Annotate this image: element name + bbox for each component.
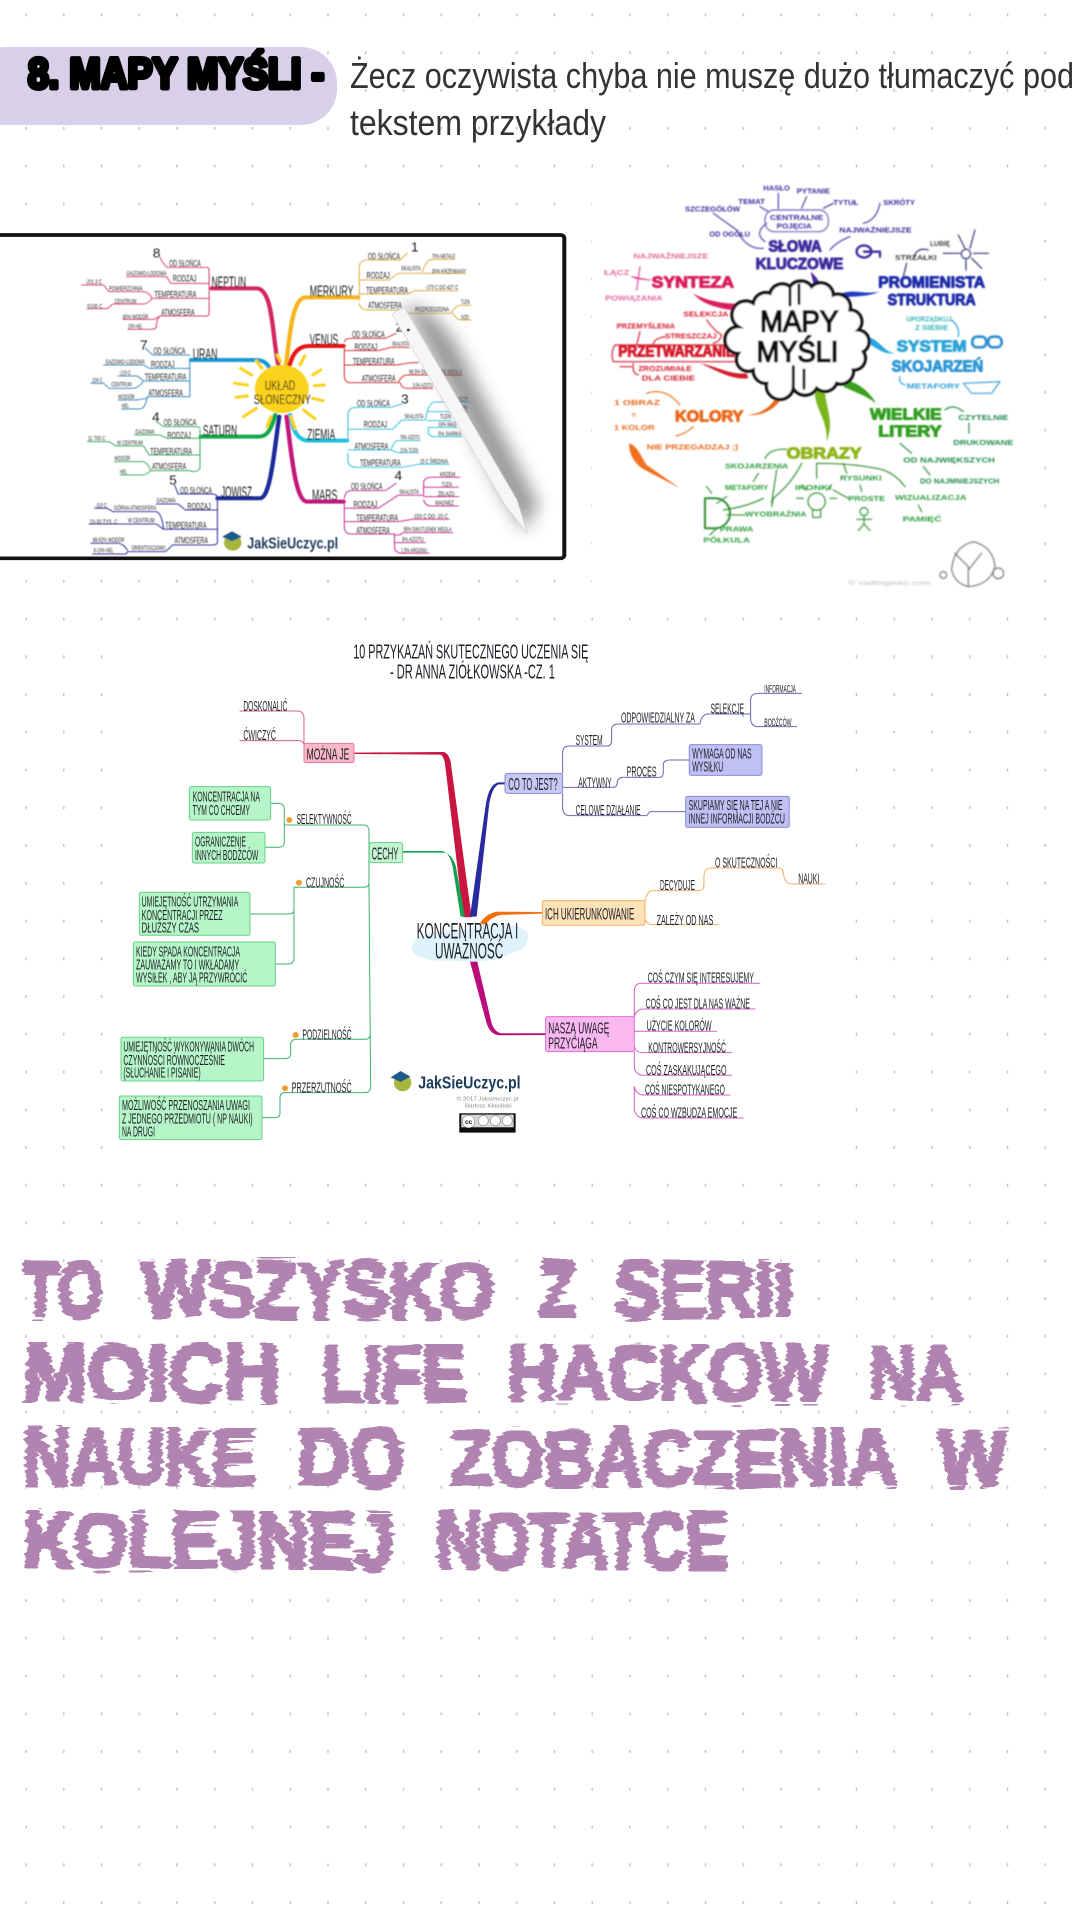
branch: Uran: GAZOWO-LODOWA [105, 359, 145, 366]
branch: Jowisz: JOWISZ [221, 484, 252, 501]
heading pill: 8. Mapy myśli: 8. MAPY MYŚLI - [28, 49, 324, 98]
branch: Neptun: GAZOWO-LODOWA [127, 271, 167, 278]
branch: Saturn: OD SŁOŃCA [164, 417, 197, 428]
branch: Mars: -153 C DO -20 C [413, 514, 448, 520]
branch: Słowa kluczowe: OD OGÓŁU [709, 230, 750, 239]
branch: Obrazy: PAMIĘĆ [903, 515, 943, 524]
branch: Merkury: 1 [411, 240, 419, 255]
branch: Wielkie litery: WIELKIE [870, 406, 942, 423]
branch: Przetwarzanie: STRESZCZAJ [665, 331, 717, 340]
branch: Neptun: -201,3 C [85, 279, 102, 286]
central topic: cloud Koncentracja i uważność: UWAŻNOŚĆ [435, 938, 503, 963]
closing message in purple distressed lettering: NA [870, 1329, 962, 1418]
branch: Uran: RODZAJ [151, 359, 175, 369]
central topic: cloud Mapy Myśli: MYŚLI [757, 335, 838, 369]
branch: Jowisz: GAZOWA [156, 498, 176, 505]
closing message in purple distressed lettering: LIFE [322, 1329, 466, 1418]
branch: Merkury: SÓD [461, 313, 469, 321]
branch: Ich ukierunkowanie: DECYDUJE [660, 878, 695, 894]
branch: Venus: SKALISTA [392, 341, 409, 348]
branch: Saturn: 11 700 C [88, 436, 105, 443]
logo: JakSieUczyc with licence badge: © 2017 Jaksieuczyc.pl [457, 1096, 518, 1103]
branch: System skojarzeń: SYSTEM [897, 339, 967, 356]
branch: Wielkie litery [843, 380, 1013, 485]
closing message in purple distressed lettering: DO [298, 1413, 404, 1502]
branch: Neptun: 5100 C [87, 304, 103, 310]
branch: Merkury: RODZAJ [367, 270, 390, 280]
branch: Merkury: OD SŁOŃCA [368, 251, 400, 261]
credit and tree logo [848, 542, 1004, 587]
branch: Obrazy: PROSTE [848, 494, 885, 503]
branch: Słowa kluczowe: SKRÓTY [883, 198, 915, 207]
trait: czujność: DŁUŻSZY CZAS [142, 919, 199, 937]
branch: Ziemia: TLEN [455, 405, 467, 411]
intro text block [350, 55, 1074, 143]
branch: Jowisz: RODZAJ [187, 501, 211, 511]
branch: Merkury: 30% KRZEMIANY [432, 269, 466, 275]
branch: Uran: URAN [193, 346, 217, 363]
branch: Obrazy: PRAWA [720, 525, 754, 534]
closing message in purple distressed lettering: SERII [615, 1245, 793, 1334]
branch: Venus: 2 [396, 320, 403, 335]
branch: Co to jest?: PROCES [627, 765, 657, 781]
branch: Saturn: HEL [120, 469, 127, 476]
branch: Słowa kluczowe: CENTRALNE [770, 213, 823, 222]
branch: Wielkie litery: OD NAJWIĘKSZYCH [903, 456, 995, 465]
branch: Merkury: -173 C DO 427 C [425, 285, 458, 291]
branch: Co to jest?: BODŹCÓW [764, 716, 792, 729]
branch: Co to jest?: INNEJ INFORMACJI BODŹCU [689, 810, 785, 827]
panel: colourful hand-drawn mind map [592, 178, 1030, 592]
branch: Jowisz: W CENTRUM [128, 518, 155, 525]
branch: Jowisz: 8-10% HEL [94, 548, 114, 555]
branch: Kolory [614, 388, 790, 488]
branch: Venus: 3,5% AZOTU [413, 383, 433, 389]
branch: Merkury: TLEN [461, 299, 470, 306]
branch: Cechy: CZUJNOŚĆ [306, 873, 345, 891]
branch: Przetwarzanie: DLA CIEBIE [642, 374, 695, 383]
branch: Uran: ATMOSFERA [148, 387, 183, 398]
branch: Venus [288, 320, 462, 389]
branch: Synteza [604, 251, 748, 312]
trait: przerzutność [119, 1079, 352, 1141]
central topic: cloud Mapy Myśli [725, 281, 869, 399]
branch: System skojarzeń [863, 315, 1002, 393]
branch: Mars: MARS [312, 487, 337, 504]
branch: Mars: 3% AZOTU [402, 537, 424, 544]
branch: Ziemia [290, 392, 469, 468]
branch: Uran: TEMPERATURA [145, 371, 187, 382]
branch: Saturn: 4 [152, 410, 160, 425]
trait: czujność: KONCENTRACJI PRZEZ [142, 908, 223, 924]
closing message in purple distressed lettering: W [939, 1413, 1007, 1502]
trait: czujność: ZAUWAŻAMY TO I WKŁADAMY [136, 955, 240, 973]
branch: Co to jest?: SYSTEM [576, 733, 603, 749]
branch: Cechy: SELEKTYWNOŚĆ [297, 810, 352, 828]
logo: JakSieUczyc [223, 532, 338, 552]
branch: Promienista struktura: STRUKTURA [888, 292, 976, 309]
branch: Co to jest?: CELOWE DZIAŁANIE [576, 803, 641, 819]
trait: selektywność: INNYCH BODŹCÓW [195, 847, 259, 864]
branch: Uran: -219 C [119, 370, 131, 377]
branch: Naszą uwagę przyciąga: KONTROWERSYJNOŚĆ [648, 1038, 726, 1056]
panel: solar system mind map [0, 235, 564, 558]
branch: Wielkie litery: LITERY [878, 424, 942, 441]
branch: Co to jest?: INFORMACJA [764, 683, 796, 695]
branch: Mars: 1,5% ARGONU [401, 548, 427, 554]
closing message in purple distressed lettering: NAUKE [23, 1413, 256, 1502]
branch: Co to jest?: AKTYWNY [578, 775, 612, 791]
trait: selektywność: TYM CO CHCEMY [193, 803, 250, 819]
branch: Neptun: TEMPERATURA [155, 289, 197, 300]
central topic: sun [235, 355, 324, 429]
branch: Kolory: NIE PRZEGADZAJ ;) [647, 442, 739, 451]
branch: Wielkie litery: DO NAJMNIEJSZYCH [920, 476, 999, 485]
chart title: - DR ANNA ZIÓŁKOWSKA -CZ. 1 [390, 660, 555, 683]
branch: Ich ukierunkowanie: O SKUTECZNOŚCI [715, 853, 777, 871]
branch: Jowisz: -110 C [95, 503, 107, 509]
branch: Obrazy: PÓŁKULA [703, 536, 751, 545]
branch: Venus: RODZAJ [355, 341, 377, 352]
branch: Ziemia: 15 C ŚREDNIA [420, 457, 448, 465]
branch: Cechy: CECHY [372, 843, 398, 863]
branch: Mars: OD SŁOŃCA [351, 481, 383, 491]
branch: Neptun: ATMOSFERA [161, 307, 195, 317]
icon: page curl shadow and stylus pen [392, 303, 538, 533]
branch: Słowa kluczowe: SZCZEGÓŁÓW [685, 205, 740, 214]
branch: Obrazy: OBRAZY [787, 445, 862, 462]
chart title: 10 PRZYKAZAŃ SKUTECZNEGO UCZENIA SIĘ [353, 640, 588, 663]
branch: Jowisz: GÓRNA ATMOSFERA [114, 503, 157, 512]
trait: podzielność: UMIEJĘTNOŚĆ WYKONYWANIA DWÓCH [123, 1038, 254, 1056]
closing message in purple distressed lettering: HACKOW [508, 1329, 828, 1418]
closing message in purple distressed lettering: Z [539, 1245, 576, 1334]
trait: przerzutność: Z JEDNEGO PRZEDMIOTU ( NP NAUKI) [122, 1111, 253, 1127]
branch: Promienista struktura [840, 230, 988, 309]
branch: Promienista struktura: PROMIENISTA [878, 274, 985, 291]
logo: JakSieUczyc: JakSieUczyc.pl [247, 534, 338, 552]
branch: Jowisz [89, 417, 279, 555]
branch: Merkury: MERKURY [310, 283, 354, 300]
closing message in purple distressed lettering: NOTATCE [436, 1496, 728, 1585]
branch: Obrazy: IKONKI [795, 483, 832, 492]
logo: JakSieUczyc with licence badge [392, 1072, 521, 1133]
branch: Neptun: 80% WODÓR [123, 312, 148, 321]
branch: Naszą uwagę przyciąga: PRZYCIĄGA [548, 1035, 598, 1052]
branch: Przetwarzanie: PRZETWARZANIE [618, 344, 735, 361]
credit and tree logo: © vadimgerko.com [848, 579, 931, 587]
trait: czujność: WYSIŁEK , ABY JĄ PRZYWRÓCIĆ [136, 970, 247, 987]
branch: Uran: 226 C [92, 378, 103, 385]
branch: Venus: TEMPERATURA [353, 356, 395, 366]
branch: Ziemia: RODZAJ [364, 419, 387, 429]
closing message in purple distressed lettering: WSZYSKO [143, 1245, 494, 1334]
branch: Słowa kluczowe [685, 184, 915, 290]
branch: Ziemia: TLEN [440, 414, 451, 420]
trait: przerzutność: MOŻLIWOŚĆ PRZENOSZANIA UWAGI [122, 1096, 250, 1114]
branch: Co to jest?: WYMAGA OD NAS [692, 746, 752, 762]
panel: concentration mind map [105, 625, 847, 1150]
branch: Jowisz: 5 [169, 473, 177, 487]
branch: Mars: 4 [395, 469, 402, 483]
branch: Ziemia: OD SŁOŃCA [357, 398, 390, 409]
branch: Można je: ĆWICZYĆ [243, 727, 276, 744]
branch: System skojarzeń: Z SIEBIE [915, 323, 948, 332]
closing message in purple distressed lettering [23, 1245, 1007, 1585]
branch: Jowisz: OD SŁOŃCA [180, 485, 212, 495]
branch: Merkury: 70% METALE [432, 254, 455, 260]
branch: Naszą uwagę przyciąga: COŚ CO WZBUDZA EMOCJE [641, 1103, 737, 1121]
branch: Ich ukierunkowanie: ZALEŻY OD NAS [657, 911, 713, 929]
logo: JakSieUczyc with licence badge: Bartosz Kłosiński [465, 1104, 512, 1110]
branch: Ich ukierunkowanie [480, 853, 825, 929]
logo: JakSieUczyc with licence badge: JakSieUczyc.pl [418, 1072, 521, 1092]
branch: Mars: ATMOSFERA [356, 525, 390, 535]
central topic: sun: UKŁAD [265, 379, 295, 394]
branch: Ziemia: 5% SIARKA [438, 431, 461, 438]
branch: Naszą uwagę przyciąga: COŚ NIESPOTYKANEGO [645, 1080, 725, 1098]
branch: Mars: SKALISTA [399, 489, 419, 496]
central topic: cloud Mapy Myśli: MAPY [760, 306, 838, 339]
branch: Ziemia: ATMOSFERA [355, 441, 389, 451]
branch: Słowa kluczowe: TEMAT [738, 197, 766, 206]
branch: Saturn [87, 410, 275, 476]
branch: Saturn: SATURN [203, 423, 237, 440]
branch: System skojarzeń: UPORZĄDKUJ [907, 315, 952, 324]
branch: Słowa kluczowe: HASŁO [763, 184, 790, 193]
branch: Merkury: ROZRZEDZONA [415, 307, 449, 314]
branch: Promienista struktura: LUBIĘ [930, 239, 950, 248]
branch: Mars: TEMPERATURA [356, 512, 399, 523]
branch: System skojarzeń: METAFORY [907, 381, 960, 390]
branch: Słowa kluczowe: PYTANIE [797, 186, 830, 195]
branch: Uran: HEL [122, 403, 129, 410]
intro text block: tekstem przykłady [350, 102, 606, 143]
branch: Saturn: WODÓR [115, 454, 130, 463]
closing message in purple distressed lettering: TO [23, 1245, 103, 1334]
heading pill: 8. Mapy myśli [0, 47, 337, 125]
branch: Mars [287, 417, 460, 554]
branch: Przetwarzanie: SELEKCJA [683, 310, 729, 319]
branch: Słowa kluczowe: NAJWAŻNIEJSZE [839, 226, 912, 235]
branch: Naszą uwagę przyciąga: UŻYCIE KOLORÓW [647, 1017, 712, 1035]
branch: Przetwarzanie: ZROZUMIAŁE [638, 364, 692, 373]
branch: Mars: KRZEM [440, 472, 455, 479]
branch: Cechy: PODZIELNOŚĆ [302, 1025, 352, 1043]
trait: selektywność [189, 787, 352, 864]
branch: Słowa kluczowe: POJĘCIA [777, 221, 812, 230]
branch: Merkury: TEMPERATURA [366, 285, 408, 295]
branch: Saturn: RODZAJ [167, 430, 191, 440]
branch: Co to jest?: ODPOWIEDZIALNY ZA [621, 711, 695, 727]
branch: Synteza: POWIĄZANIA [605, 294, 664, 303]
branch: Ziemia: 78% AZOTU [400, 435, 420, 441]
branch: Naszą uwagę przyciąga: COŚ ZASKAKUJĄCEGO [646, 1061, 727, 1079]
branch: Przetwarzanie [612, 310, 748, 383]
branch: Neptun: 19% HEL [128, 324, 143, 330]
branch: Venus: VENUS [310, 332, 338, 349]
branch: Ziemia: 21% TLEN [400, 448, 418, 454]
trait: przerzutność: NA DRUGI [122, 1125, 155, 1141]
closing message in purple distressed lettering: MOICH [23, 1329, 280, 1418]
branch: Kolory: 1 KOLOR [614, 423, 656, 432]
branch: Uran [91, 338, 272, 410]
branch: Co to jest?: WYSIŁKU [692, 760, 723, 776]
branch: Uran: 7 [140, 338, 148, 352]
branch: Jowisz: ATMOSFERA [175, 535, 208, 545]
branch: Kolory: = [632, 410, 636, 419]
trait: selektywność: OGRANICZENIE [195, 835, 246, 851]
branch: Naszą uwagę przyciąga: NASZĄ UWAGĘ [548, 1020, 609, 1037]
branch: Słowa kluczowe: TYTUŁ [833, 198, 859, 207]
branch: Jowisz: 20-30 TYS. C [90, 519, 117, 526]
branch: Co to jest?: SELEKCJĘ [711, 701, 744, 717]
branch: Ziemia: 18% MAG [438, 422, 456, 429]
branch: Mars: 95% DWUTLENEK WĘGLA [404, 527, 452, 534]
branch: Obrazy: WYOBRAŹNIA [745, 510, 808, 519]
central topic: cloud Koncentracja i uważność: KONCENTRACJA I [417, 918, 518, 943]
branch: Synteza: SYNTEZA [652, 274, 734, 291]
branch: Uran: OD SŁOŃCA [153, 345, 186, 356]
trait: podzielność: (SŁUCHANIE I PISANIE) [123, 1065, 201, 1081]
branch: Ich ukierunkowanie: NAUKI [798, 871, 819, 887]
branch: Ziemia: SKALISTA [404, 414, 424, 420]
branch: Słowa kluczowe: SŁOWA [768, 239, 822, 256]
branch: Cechy: PRZERZUTNOŚĆ [292, 1079, 352, 1097]
trait: podzielność [121, 1025, 352, 1081]
branch: Saturn: GAZOWA [135, 429, 155, 436]
branch: Obrazy: RYSUNKI [840, 474, 882, 483]
branch: Kolory: 1 OBRAZ [614, 398, 661, 407]
branch: Neptun: CENTRUM [115, 299, 136, 305]
branch: Venus: OD SŁOŃCA [352, 329, 385, 339]
branch: Jowisz: 88-92% WODÓR [93, 535, 124, 544]
branch: Mars: TLEN [442, 482, 452, 489]
branch: Neptun: NEPTUN [212, 274, 246, 291]
branch: Mars: ŻELAZO [438, 489, 455, 498]
trait: czujność: UMIEJĘTNOŚĆ UTRZYMANIA [142, 893, 239, 911]
branch: Saturn: W CENTRUM [117, 440, 143, 447]
trait: podzielność: CZYNNOŚCI RÓWNOCZEŚNIE [123, 1051, 225, 1069]
branch: Neptun: OD SŁOŃCA [169, 258, 201, 269]
central topic: cloud Koncentracja i uważność [412, 918, 528, 963]
branch: Można je: DOSKONALIĆ [243, 698, 287, 715]
trait: czujność: KIEDY SPADA KONCENTRACJA [136, 945, 240, 961]
branch: Ich ukierunkowanie: ICH UKIERUNKOWANIE [545, 904, 634, 923]
branch: Uran: WODÓR [118, 392, 135, 401]
branch: Merkury: ATMOSFERA [368, 300, 402, 310]
branch: Przetwarzanie: PRZEMYŚLENIA [617, 321, 676, 330]
branch: Saturn: TEMPERATURA [150, 446, 192, 456]
branch: Synteza: NAJWAŻNIEJSZE [633, 251, 708, 260]
branch: Obrazy [703, 390, 968, 545]
branch: Co to jest? [470, 683, 802, 917]
branch: Kolory: KOLORY [675, 409, 743, 426]
branch: Ziemia: ZIEMIA [307, 427, 335, 444]
chart title [353, 640, 588, 683]
branch: Jowisz: TEMPERATURA [165, 520, 207, 531]
branch: Jowisz: ORIENTOSCIOWO [132, 545, 166, 552]
trait: selektywność: KONCENTRACJA NA [193, 790, 260, 806]
logo: JakSieUczyc with licence badge: cc [465, 1119, 473, 1126]
branch: Merkury [285, 240, 471, 368]
branch: Promienista struktura: STRZAŁKI [895, 253, 937, 262]
branch: Obrazy: WIZUALIZACJA [895, 493, 968, 502]
branch: Słowa kluczowe: KLUCZOWE [756, 256, 843, 273]
branch: Ziemia: TEMPERATURA [360, 457, 401, 468]
branch: Obrazy: METAFORY [725, 483, 768, 492]
trait: czujność [133, 873, 345, 987]
branch: Venus: 96,5% DWUTLENEK WĘGLA [409, 369, 462, 376]
branch: Venus: ATMOSFERA [362, 373, 396, 384]
branch: Mars: RODZAJ [353, 499, 377, 509]
branch: Saturn: ATMOSFERA [152, 461, 187, 471]
branch: Ziemia: AZOT [455, 397, 469, 404]
closing message in purple distressed lettering: KOLEJNEJ [23, 1496, 394, 1585]
branch: Synteza: ŁĄCZ [604, 268, 630, 277]
closing message in purple distressed lettering: ZOBACZENIA [450, 1413, 897, 1502]
branch: Uran: CENTRUM [111, 382, 132, 389]
branch: Naszą uwagę przyciąga: COŚ CO JEST DLA NAS WAŻNE [646, 994, 750, 1012]
branch: Neptun: POWIERZCHNIA [109, 286, 143, 293]
central topic: sun: SŁONECZNY [254, 393, 311, 408]
branch: Naszą uwagę przyciąga [470, 962, 760, 1121]
branch: Neptun: 8 [153, 246, 160, 260]
branch: Merkury: SKALISTA [401, 266, 421, 273]
branch: Wielkie litery: CZYTELNIE [958, 413, 1008, 422]
branch: System skojarzeń: SKOJARZEŃ [892, 359, 983, 376]
branch: Co to jest?: SKUPIAMY SIĘ NA TEJ A NIE [689, 798, 783, 814]
branch: Mars: MAGNEZ [435, 500, 454, 507]
branch: Wielkie litery: DRUKOWANE [953, 438, 1013, 447]
branch: Cechy [119, 787, 465, 1141]
branch: Obrazy: SKOJARZENIA [725, 461, 789, 470]
branch: Neptun: RODZAJ [173, 273, 196, 284]
branch: Neptun [82, 246, 279, 368]
branch: Można je: MOŻNA JE [307, 744, 349, 763]
branch: Co to jest?: CO TO JEST? [508, 774, 558, 794]
branch: Można je [240, 698, 472, 917]
branch: Ziemia: 3 [401, 392, 409, 406]
branch: Naszą uwagę przyciąga: COŚ CZYM SIĘ INTERESUJEMY [648, 969, 754, 987]
